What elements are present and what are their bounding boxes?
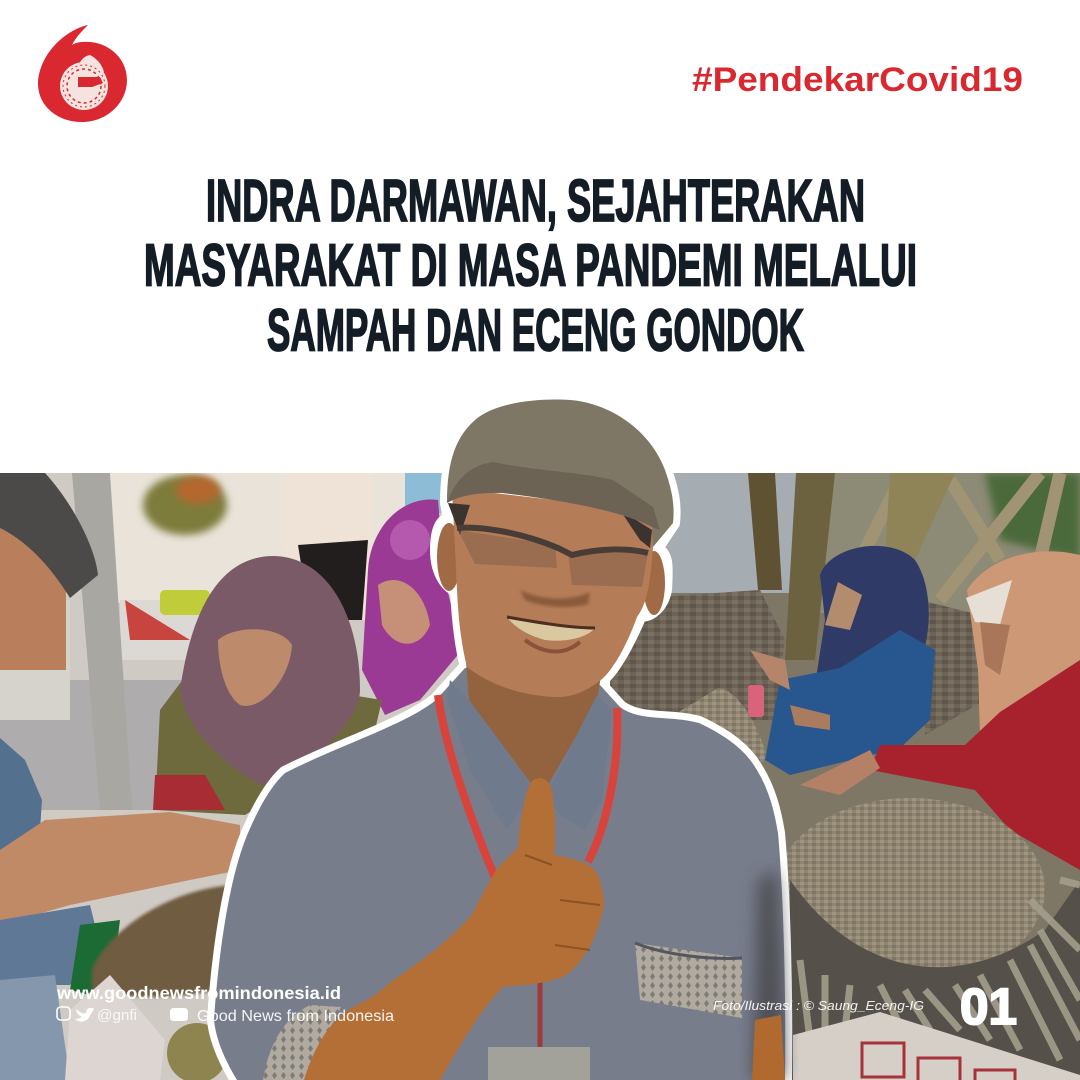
right arm — [752, 1015, 785, 1080]
left man — [0, 525, 66, 670]
footer: website and socials: www.goodnewsfromindonesia.id — [56, 983, 341, 1003]
green mat — [70, 920, 120, 1000]
shirt shadow — [752, 870, 785, 1080]
white cut-out outline — [214, 400, 785, 1080]
left photo: craft workshop at exhibition — [0, 473, 462, 1080]
woven basket — [92, 885, 240, 997]
face — [452, 488, 655, 697]
pillar — [72, 473, 132, 810]
hat — [447, 400, 674, 547]
woven wall — [610, 590, 785, 720]
round mat — [786, 798, 1045, 968]
ears — [437, 523, 665, 615]
glasses — [457, 528, 648, 587]
roof and greenery — [800, 473, 1080, 613]
icon: instagram — [57, 1007, 70, 1020]
cinderblock wall — [665, 473, 805, 593]
page name: Good News from Indonesia — [197, 1008, 394, 1025]
magenta hijab woman — [362, 500, 462, 715]
main figure: Indra Darmawan — [214, 400, 785, 1080]
title — [144, 168, 917, 364]
hair — [448, 503, 652, 548]
social handle: @gnfi — [97, 1008, 137, 1024]
flowers — [143, 475, 227, 535]
shirt — [214, 668, 785, 1080]
photo credit: Foto/Ilustrasi : © Saung_Eceng-IG — [713, 998, 924, 1013]
mauve hijab woman — [155, 670, 382, 815]
footer: website and socials — [56, 983, 394, 1025]
neck — [465, 650, 602, 797]
name tag and clip — [488, 975, 590, 1080]
collar — [447, 680, 612, 830]
pocket — [635, 943, 742, 1018]
cardboard box — [793, 1012, 1080, 1080]
bottom scraps — [65, 975, 165, 1080]
cone basket — [678, 688, 766, 762]
woman blue — [817, 546, 929, 672]
dark figure background — [362, 603, 366, 620]
lanyard — [438, 695, 617, 880]
fringe strips — [790, 880, 1080, 1080]
right photo: weaving group — [610, 473, 1080, 1080]
hashtag: #PendekarCovid19 — [692, 61, 1023, 99]
icon: youtube — [170, 1008, 188, 1021]
woman red — [967, 551, 1080, 735]
hand thumbs up — [304, 778, 604, 1080]
page number: 01 — [960, 978, 1017, 1035]
smile — [507, 617, 595, 652]
sleeve cuff — [263, 1005, 341, 1080]
icon: twitter — [75, 1008, 94, 1022]
logo — [38, 25, 127, 122]
